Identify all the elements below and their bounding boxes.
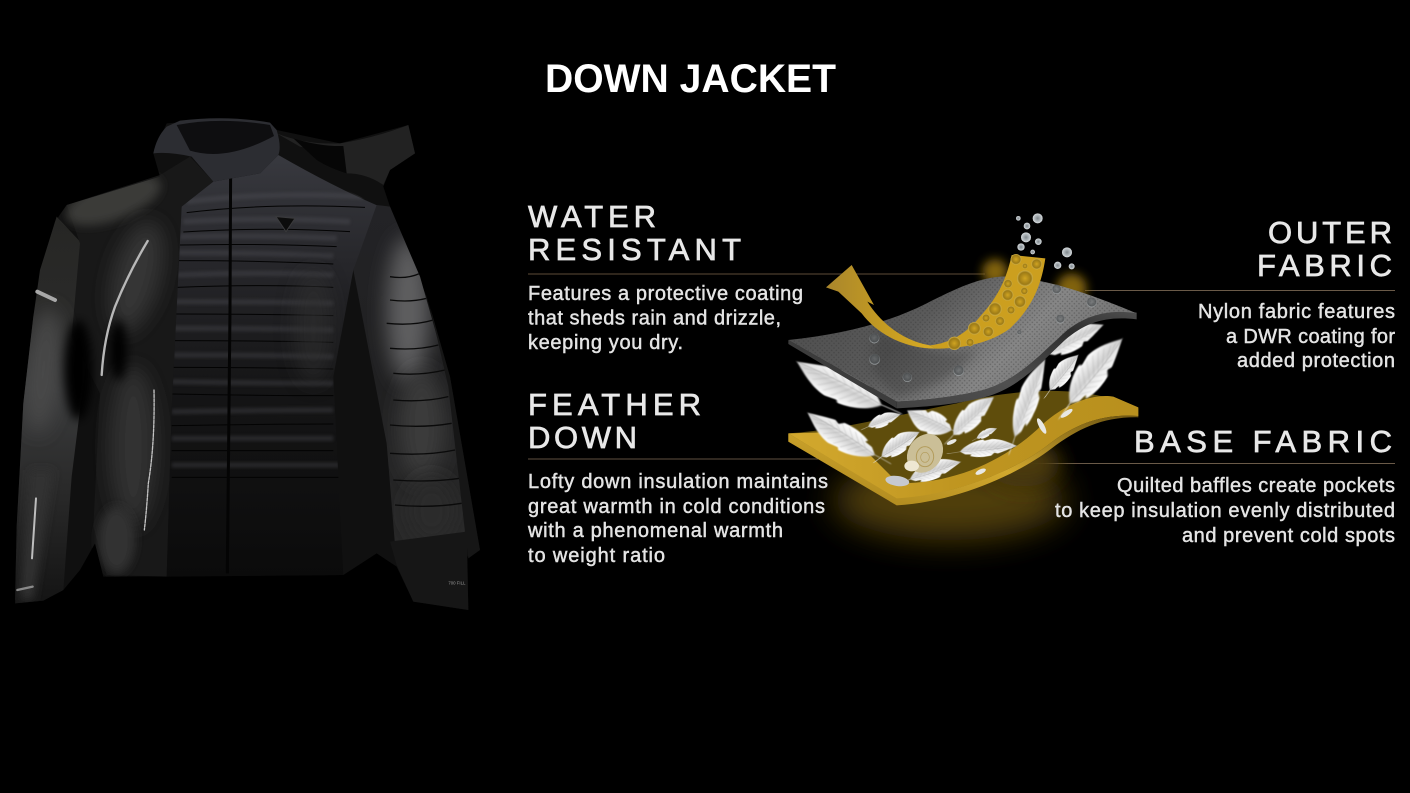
fill label on cuff: 700 FILL [448, 580, 466, 585]
droplets on outer fabric [869, 285, 1097, 382]
base fabric layer [788, 391, 1138, 505]
text: water resistant description: that sheds rain and drizzle, [528, 308, 781, 330]
puffer quilting lines [172, 195, 365, 477]
water droplets above fabric [1016, 213, 1075, 269]
heading: outer fabric: FABRIC [1257, 248, 1392, 283]
heading: water resistant: WATER [528, 199, 656, 234]
text: outer fabric description: a DWR coating for [1226, 326, 1395, 348]
title: DOWN JACKET [545, 57, 836, 101]
jacket silhouette [15, 120, 480, 610]
collar [153, 118, 280, 182]
sleeve highlights and quilting [387, 237, 462, 543]
layered fabric diagram [788, 213, 1138, 540]
heading: water resistant: RESISTANT [528, 232, 741, 267]
text: base fabric description: and prevent cold spots [1182, 525, 1395, 547]
text: water resistant description: Features a protective coating [528, 283, 803, 305]
right puffer sleeve [353, 205, 467, 565]
swirled feather [899, 427, 951, 480]
connector line: base fabric [1030, 462, 1395, 464]
small down tufts [885, 407, 1074, 488]
feathers [789, 314, 1133, 490]
inner puffer body [167, 155, 380, 577]
outer fabric layer [788, 277, 1137, 408]
text: feather down description [527, 471, 828, 567]
heading: feather down [528, 387, 701, 455]
text: outer fabric description: added protection [1237, 350, 1395, 372]
connector line: feather down [528, 458, 915, 460]
center zipper [227, 163, 231, 573]
hood flap [277, 125, 415, 185]
droplets on gold strip [948, 254, 1042, 350]
heading: base fabric: BASE FABRIC [1134, 424, 1392, 459]
text: outer fabric description [1198, 301, 1395, 372]
text: base fabric description: Quilted baffles create pockets [1117, 475, 1395, 497]
text: water resistant description [528, 283, 803, 354]
reflective strips [17, 241, 154, 590]
text: feather down description: with a phenomenal warmth [527, 520, 783, 542]
left sleeve [15, 217, 88, 603]
heading: feather down: DOWN [528, 420, 637, 455]
connector line: outer fabric [1085, 290, 1395, 292]
outer shell left body [67, 157, 213, 577]
text: feather down description: to weight ratio [528, 545, 665, 567]
text: outer fabric description: Nylon fabric features [1198, 301, 1395, 323]
text: base fabric description [1055, 475, 1395, 547]
text: base fabric description: to keep insulation evenly distributed [1055, 500, 1395, 522]
text: feather down description: Lofty down insulation maintains [528, 471, 828, 493]
connector line: water resistant [528, 273, 985, 275]
golden glow [833, 259, 1087, 540]
text: water resistant description: keeping you dry. [528, 332, 683, 354]
right sleeve outer shell strip [430, 307, 480, 558]
heading: outer fabric: OUTER [1268, 215, 1392, 250]
heading: outer fabric [1257, 215, 1392, 283]
right cuff [390, 532, 468, 610]
heading: feather down: FEATHER [528, 387, 701, 422]
golden moisture arrow [826, 255, 1045, 349]
chest logo [276, 217, 295, 232]
shell shadows and highlights [20, 164, 174, 600]
jacket illustration [15, 118, 480, 610]
heading: water resistant [528, 199, 741, 267]
text: feather down description: great warmth in cold conditions [528, 496, 825, 518]
